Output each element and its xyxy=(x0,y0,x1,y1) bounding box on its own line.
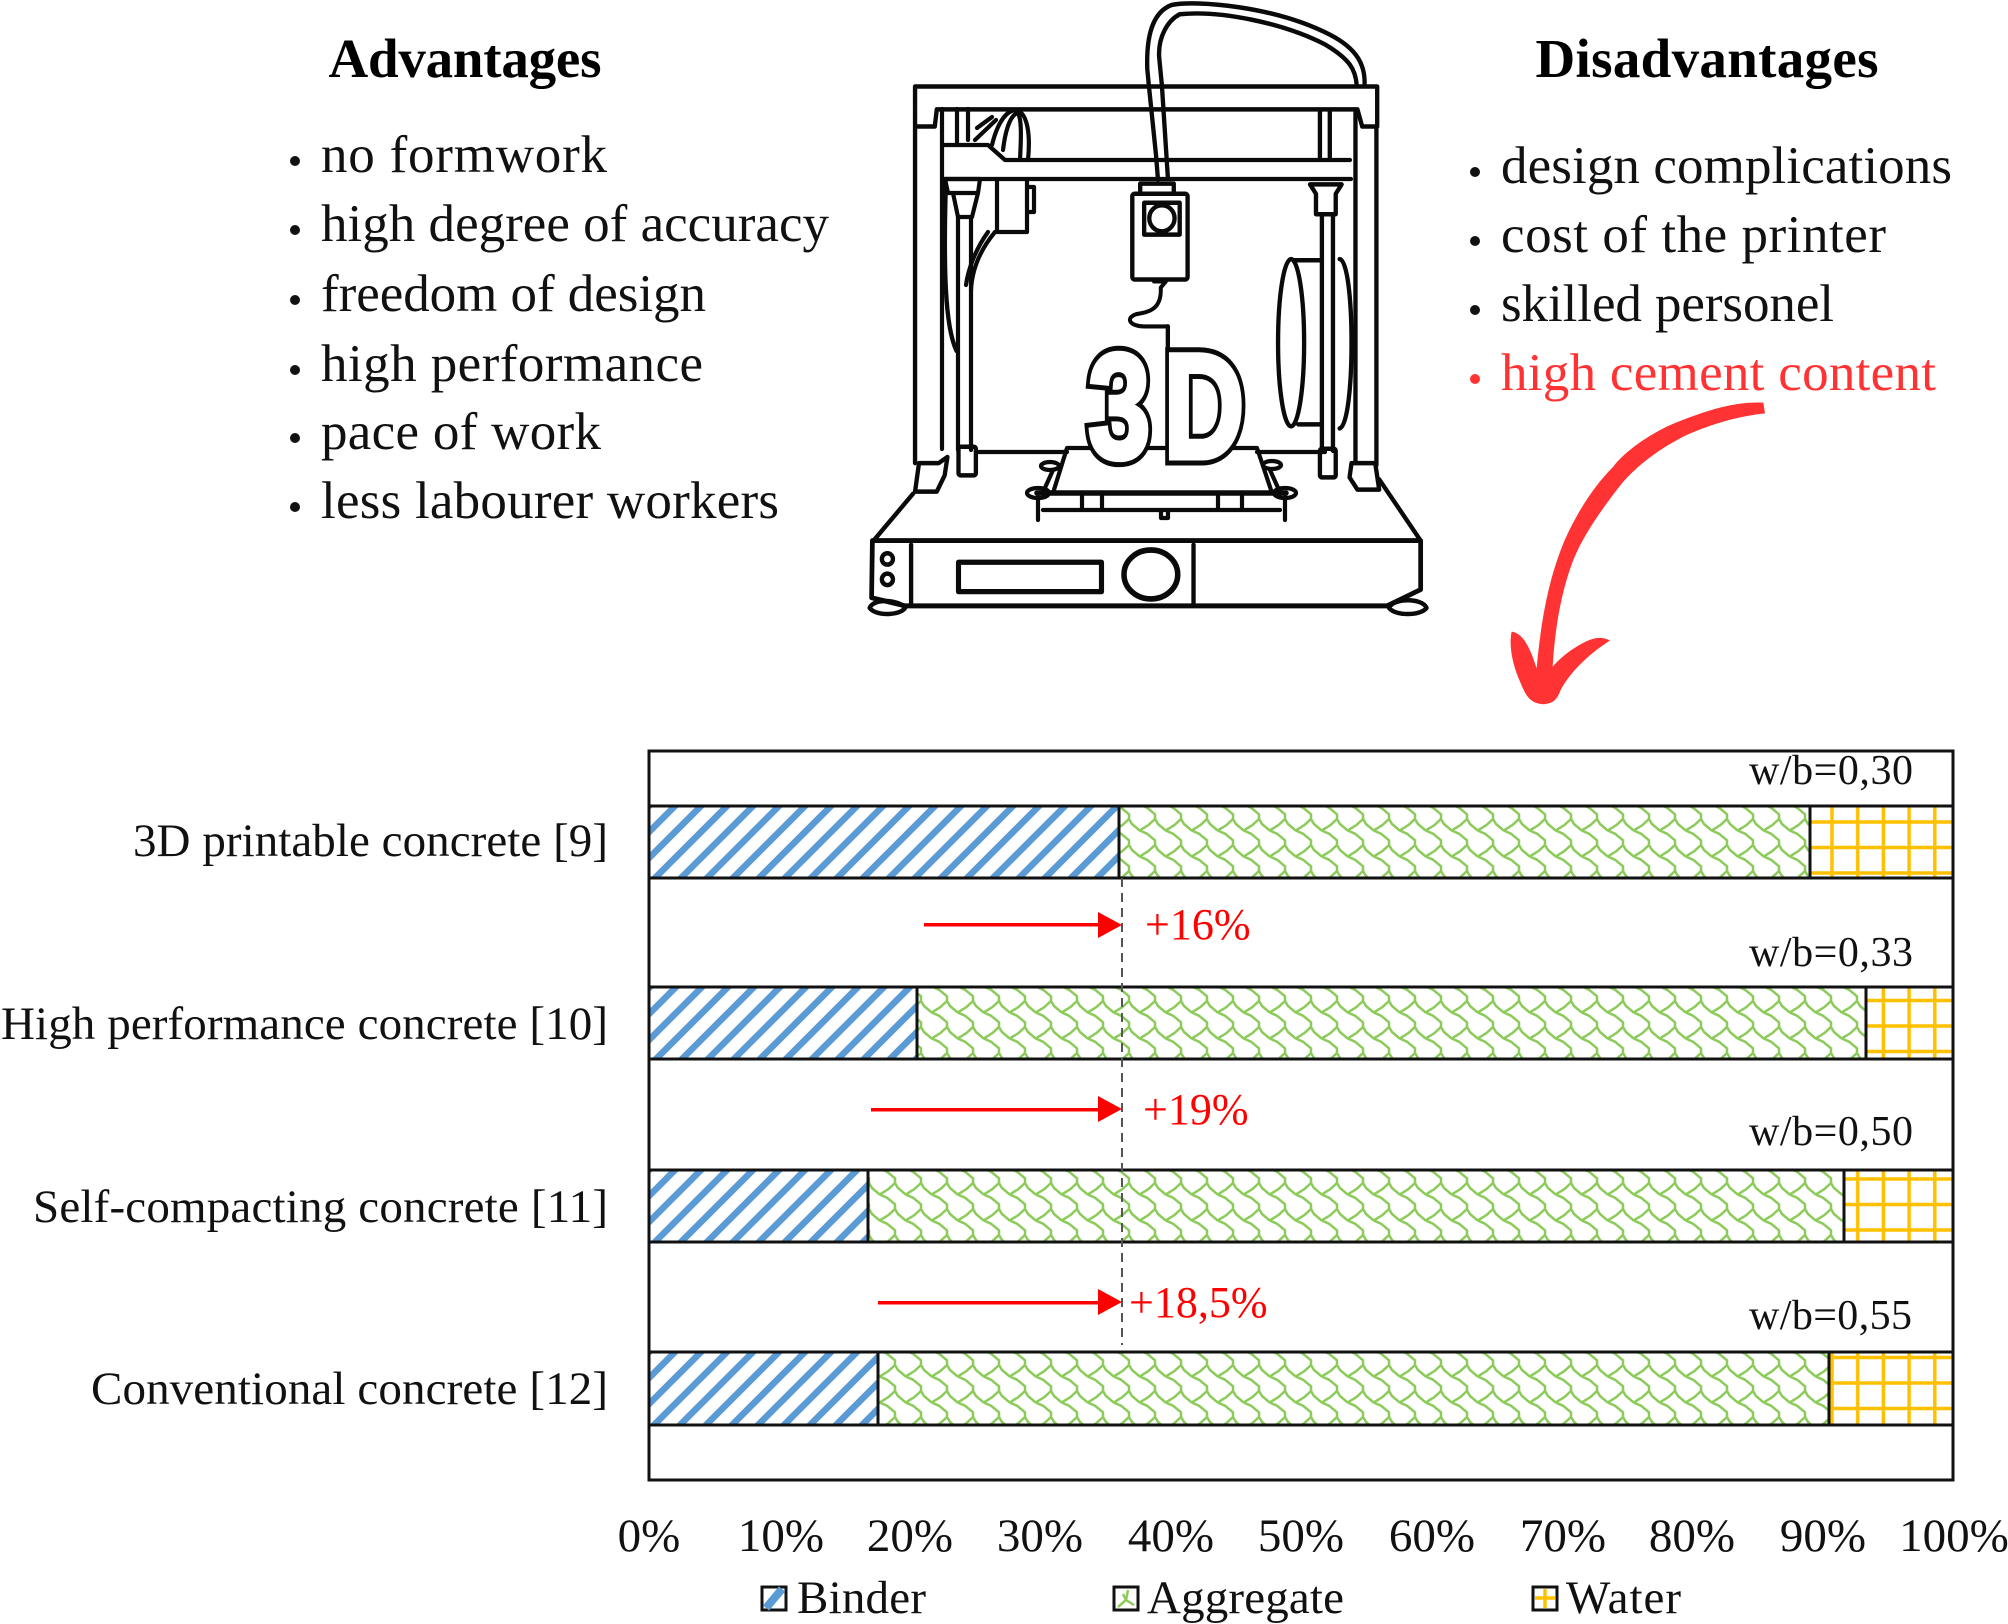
w/b ratios xyxy=(1749,748,1913,1339)
x axis labels: 80% xyxy=(1649,1510,1735,1562)
legend: water: Water xyxy=(1566,1572,1681,1624)
list: disadvantages xyxy=(1470,137,1952,402)
panel: disadvantages xyxy=(1470,28,1952,402)
icon: 3D printer xyxy=(870,3,1427,614)
list: advantages: high degree of accuracy xyxy=(321,195,830,253)
list: advantages: freedom of design xyxy=(321,265,706,323)
list: advantages: no formwork xyxy=(321,126,608,184)
bar: conventional concrete xyxy=(649,1352,1953,1425)
legend xyxy=(762,1572,1681,1624)
w/b ratios: w/b=0,55 xyxy=(1749,1293,1912,1339)
value: +19%: +19% xyxy=(1143,1085,1248,1134)
arrow: curved red arrow to chart xyxy=(1511,403,1765,704)
arrow: +19% xyxy=(871,1096,1122,1122)
x axis labels: 90% xyxy=(1780,1510,1866,1562)
chart frame xyxy=(649,751,1953,1480)
category labels: 3D printable concrete [9] xyxy=(133,815,608,867)
label: 3D model text: 3D xyxy=(1088,323,1245,491)
x axis labels: 0% xyxy=(618,1510,680,1562)
list: disadvantages: high cement content xyxy=(1501,344,1936,402)
w/b ratios: w/b=0,50 xyxy=(1749,1109,1913,1155)
arrow: +18,5% xyxy=(878,1289,1122,1315)
printer build plate xyxy=(976,448,1325,520)
bar: high performance concrete xyxy=(649,987,1953,1059)
list: disadvantages: design complications xyxy=(1501,137,1952,195)
category labels: Conventional concrete [12] xyxy=(91,1363,608,1415)
category labels: Self-compacting concrete [11] xyxy=(33,1181,608,1233)
x axis labels: 40% xyxy=(1128,1510,1214,1562)
bar: 3D printable concrete xyxy=(649,806,1953,878)
x axis labels: 100% xyxy=(1899,1510,2008,1562)
chart: stacked bar composition xyxy=(1,748,2008,1624)
list: advantages: pace of work xyxy=(321,403,602,461)
x axis labels xyxy=(618,1510,2008,1562)
panel: advantages xyxy=(290,28,830,530)
category labels xyxy=(1,815,608,1415)
list: disadvantages: skilled personel xyxy=(1501,275,1834,333)
arrow: +16% xyxy=(924,912,1122,938)
x axis labels: 20% xyxy=(867,1510,953,1562)
label: 3D model text: 3D xyxy=(1088,323,1245,491)
heading: advantages: Advantages xyxy=(328,28,602,89)
list: advantages: high performance xyxy=(321,335,703,393)
heading: disadvantages: Disadvantages xyxy=(1536,28,1878,89)
x axis labels: 70% xyxy=(1520,1510,1606,1562)
w/b ratios: w/b=0,33 xyxy=(1749,930,1913,976)
value: +18,5%: +18,5% xyxy=(1129,1278,1267,1327)
x axis labels: 50% xyxy=(1258,1510,1344,1562)
list: advantages xyxy=(290,126,830,530)
legend: binder: Binder xyxy=(797,1572,926,1624)
bar: self-compacting concrete xyxy=(649,1170,1953,1242)
legend: aggregate: Aggregate xyxy=(1147,1572,1344,1624)
x axis labels: 30% xyxy=(997,1510,1083,1562)
list: disadvantages: cost of the printer xyxy=(1501,206,1886,264)
x axis labels: 10% xyxy=(738,1510,824,1562)
category labels: High performance concrete [10] xyxy=(1,998,608,1050)
printer upper-left detail xyxy=(942,109,1351,450)
reference dashed line xyxy=(1121,878,1123,1345)
list: advantages: less labourer workers xyxy=(321,472,779,530)
x axis labels: 60% xyxy=(1389,1510,1475,1562)
w/b ratios: w/b=0,30 xyxy=(1749,748,1913,794)
value: +16%: +16% xyxy=(1145,900,1250,949)
